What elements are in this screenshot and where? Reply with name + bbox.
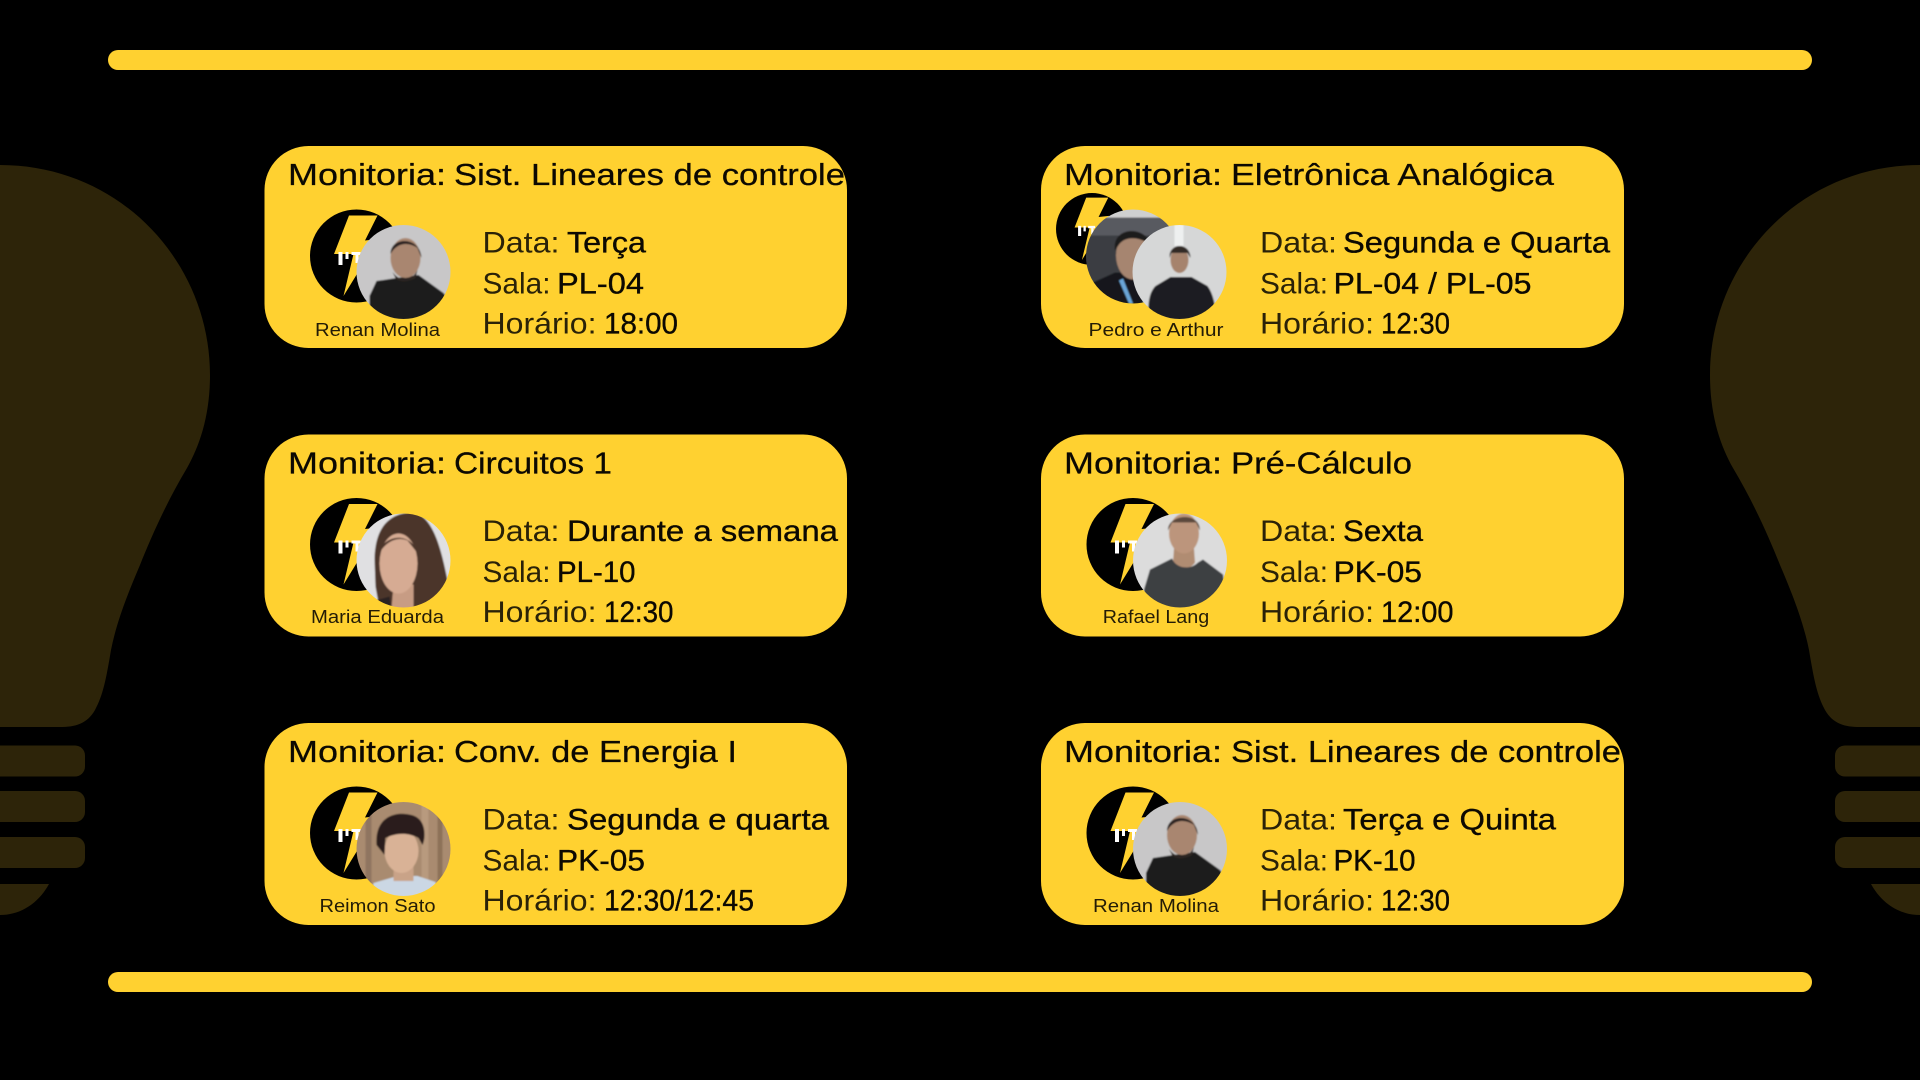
- schedule details: Terça: [567, 226, 646, 260]
- panel: Eletrônica Analógica, Pedro e Arthur: [1041, 146, 1624, 348]
- schedule details: Terça e Quinta: [1343, 804, 1556, 836]
- heading: Circuitos 1: [454, 446, 612, 480]
- heading: Sist. Lineares de controle: [454, 157, 845, 192]
- icon: logo: [1086, 498, 1180, 591]
- icon: logo: [310, 210, 403, 302]
- name: Renan Molina: Renan Molina: [1093, 896, 1220, 916]
- heading: Eletrônica Analógica: [1231, 157, 1555, 192]
- schedule details: Horário:: [482, 596, 596, 629]
- bottom yellow bar: [108, 972, 1812, 992]
- schedule details: PL-04: [557, 268, 644, 300]
- panel: Circuitos 1, Maria Eduarda: [264, 434, 847, 636]
- schedule details: Sala:: [482, 268, 550, 300]
- schedule details: Data:: [482, 226, 560, 260]
- heading: Monitoria:: [1064, 157, 1222, 192]
- schedule details: Sala:: [1260, 556, 1328, 589]
- name: Renan Molina: Renan Molina: [315, 320, 441, 340]
- schedule details: Horário:: [1260, 884, 1374, 918]
- heading: Sist. Lineares de controle: [1231, 734, 1621, 769]
- schedule details: Sala:: [1260, 268, 1328, 300]
- schedule details: Sala:: [482, 844, 550, 878]
- schedule details: Durante a semana: [567, 515, 838, 548]
- schedule details: [1260, 226, 1610, 340]
- heading: [288, 446, 612, 480]
- schedule details: 12:00: [1381, 596, 1454, 629]
- heading: Conv. de Energia I: [454, 734, 737, 769]
- schedule details: Segunda e quarta: [567, 804, 829, 836]
- schedule details: 18:00: [604, 308, 678, 340]
- panel: Sist. Lineares de controle, Renan Molina (Terça e Quinta): [1041, 723, 1624, 925]
- schedule details: Data:: [1260, 226, 1337, 260]
- schedule details: 12:30/12:45: [604, 884, 754, 918]
- heading: [1064, 446, 1412, 480]
- panel: Sist. Lineares de controle, Renan Molina: [264, 146, 847, 348]
- heading: [1064, 157, 1555, 192]
- schedule details: Data:: [482, 804, 560, 836]
- panel: Conv. de Energia I, Reimon Sato: [264, 723, 847, 925]
- photo: Rafael Lang: [1132, 512, 1228, 608]
- panel: Pré-Cálculo, Rafael Lang: [1041, 434, 1624, 636]
- schedule details: [482, 804, 829, 918]
- heading: Monitoria:: [288, 734, 446, 769]
- schedule details: Data:: [1260, 515, 1337, 548]
- schedule details: PL-04 / PL-05: [1334, 268, 1532, 300]
- heading: Monitoria:: [1064, 446, 1222, 480]
- name: Pedro e Arthur: Pedro e Arthur: [1088, 320, 1224, 340]
- schedule details: Horário:: [482, 308, 596, 340]
- icon: right light bulb silhouette: [1710, 165, 1920, 915]
- photo: Maria Eduarda: [356, 512, 452, 608]
- schedule details: Sexta: [1343, 515, 1423, 548]
- photo: Renan Molina: [356, 224, 452, 320]
- icon: logo: [310, 498, 403, 591]
- schedule details: Segunda e Quarta: [1343, 226, 1610, 260]
- schedule details: Sala:: [1260, 844, 1328, 878]
- schedule details: PL-10: [557, 556, 636, 589]
- schedule details: [1260, 804, 1556, 918]
- icon: logo: [1056, 193, 1128, 265]
- name: Rafael Lang: Rafael Lang: [1103, 607, 1209, 627]
- schedule details: [1260, 515, 1454, 629]
- schedule details: PK-05: [1334, 556, 1422, 589]
- schedule details: 12:30: [1381, 884, 1450, 918]
- heading: Pré-Cálculo: [1231, 446, 1412, 480]
- photo: Reimon Sato: [356, 801, 452, 897]
- heading: Monitoria:: [288, 446, 446, 480]
- top yellow bar: [108, 50, 1812, 70]
- heading: [288, 734, 737, 769]
- schedule details: Horário:: [1260, 308, 1374, 340]
- heading: Monitoria:: [288, 157, 446, 192]
- photo: Arthur: [1132, 224, 1228, 320]
- schedule details: 12:30: [1381, 308, 1450, 340]
- schedule details: [482, 515, 838, 629]
- heading: Monitoria:: [1064, 734, 1222, 769]
- icon: left light bulb silhouette: [0, 165, 210, 915]
- photo: Renan Molina: [1132, 801, 1228, 897]
- schedule details: Data:: [482, 515, 560, 548]
- schedule details: 12:30: [604, 596, 674, 629]
- photo: Pedro: [1086, 210, 1169, 304]
- heading: [1064, 734, 1621, 769]
- schedule details: [482, 226, 678, 340]
- icon: logo: [310, 786, 403, 880]
- schedule details: PK-10: [1334, 844, 1416, 878]
- name: Maria Eduarda: Maria Eduarda: [311, 607, 445, 627]
- schedule details: PK-05: [557, 844, 645, 878]
- schedule details: Horário:: [482, 884, 596, 918]
- name: Reimon Sato: Reimon Sato: [320, 896, 436, 916]
- schedule details: Sala:: [482, 556, 550, 589]
- schedule details: Data:: [1260, 804, 1337, 836]
- heading: [288, 157, 845, 192]
- icon: logo: [1086, 786, 1180, 880]
- schedule details: Horário:: [1260, 596, 1374, 629]
